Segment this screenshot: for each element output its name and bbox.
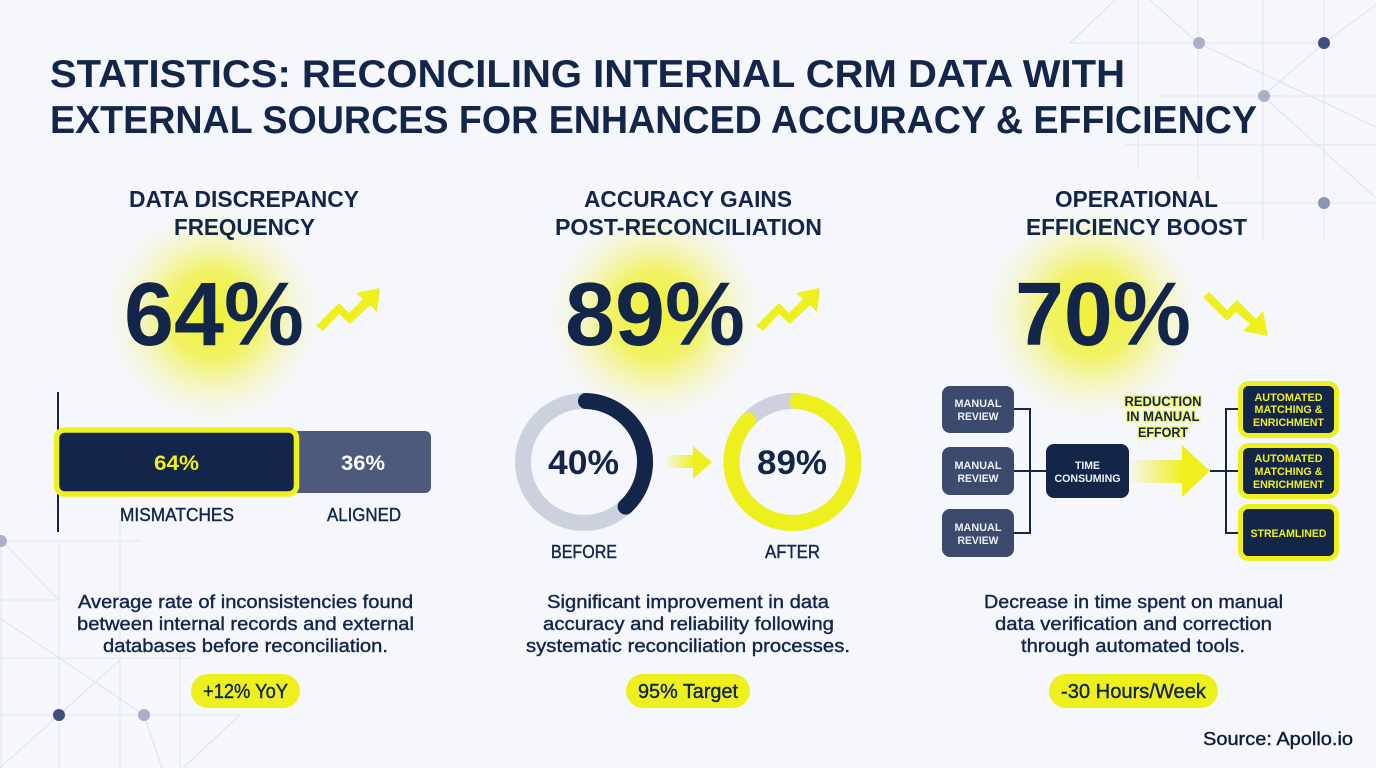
box: automated matching 1: ENRICHMENT	[1253, 417, 1324, 429]
donut chart: after	[732, 401, 854, 562]
donut chart: before: BEFORE	[551, 542, 617, 562]
big stat: 70%: 70%	[1015, 265, 1191, 365]
stacked bar chart: ALIGNED	[327, 505, 401, 525]
pill: -30 Hours/Week: -30 Hours/Week	[1061, 681, 1207, 703]
label: reduction in manual effort	[1124, 394, 1202, 440]
heading: data discrepancy	[129, 186, 359, 240]
donut chart: before: 40%	[548, 444, 619, 482]
pill: +12% YoY: +12% YoY	[203, 681, 288, 703]
pill: -30 Hours/Week	[1049, 674, 1218, 708]
stacked bar chart	[56, 392, 431, 532]
heading: accuracy gains: ACCURACY GAINS	[584, 186, 792, 212]
box: automated matching 2	[1240, 446, 1336, 496]
description text	[77, 591, 414, 656]
box: streamlined	[1240, 506, 1336, 558]
arrow: reduction	[1130, 445, 1210, 497]
description text: Significant improvement in data	[547, 591, 830, 612]
box: manual review 2: REVIEW	[958, 473, 999, 485]
panel: accuracy gains	[523, 186, 854, 708]
description text: databases before reconciliation.	[103, 635, 388, 656]
box: time consuming: TIME	[1075, 460, 1100, 472]
donut chart: after: 89%	[757, 444, 827, 482]
flow diagram	[942, 384, 1336, 558]
label: reduction in manual effort: REDUCTION	[1124, 394, 1202, 409]
heading: accuracy gains: POST-RECONCILIATION	[555, 214, 822, 240]
stacked bar chart: 36%	[341, 452, 385, 475]
highlight glow: 70%	[976, 197, 1208, 429]
box: manual review 3: REVIEW	[958, 535, 999, 547]
icon: trend down arrow	[1203, 292, 1268, 336]
title: EXTERNAL SOURCES FOR ENHANCED ACCURACY & EFFICIENCY	[50, 99, 1257, 142]
box: automated matching 2: MATCHING &	[1254, 466, 1323, 478]
description text: Decrease in time spent on manual	[984, 591, 1283, 612]
title: STATISTICS: RECONCILING INTERNAL CRM DATA WITH	[50, 53, 1125, 96]
box: automated matching 2: ENRICHMENT	[1253, 479, 1324, 491]
title	[50, 53, 1257, 142]
panel: operational efficiency	[942, 186, 1336, 708]
network pattern: top right	[1070, 0, 1376, 240]
box: manual review 1	[942, 386, 1014, 433]
donut chart: after: AFTER	[765, 542, 820, 562]
highlight glow: 64%	[97, 199, 329, 431]
highlight glow: 89%	[539, 199, 771, 431]
icon: trend up arrow	[756, 288, 820, 331]
description text	[984, 591, 1283, 656]
big stat: 64%: 64%	[124, 265, 304, 365]
donut chart: before	[523, 401, 645, 562]
heading: operational efficiency: OPERATIONAL	[1055, 186, 1218, 212]
heading: data discrepancy: DATA DISCREPANCY	[129, 186, 359, 212]
description text: through automated tools.	[1021, 635, 1245, 656]
connectors	[1014, 409, 1240, 533]
box: time consuming	[1046, 444, 1129, 498]
description text: data verification and correction	[995, 613, 1272, 634]
heading: data discrepancy: FREQUENCY	[174, 214, 315, 240]
box: manual review 2	[942, 447, 1014, 495]
heading: operational efficiency: EFFICIENCY BOOST	[1026, 214, 1247, 240]
box: automated matching 1: MATCHING &	[1254, 404, 1323, 416]
box: automated matching 2: AUTOMATED	[1254, 453, 1323, 465]
label: reduction in manual effort: IN MANUAL	[1126, 409, 1200, 424]
box: manual review 1: REVIEW	[958, 411, 999, 423]
box: manual review 2: MANUAL	[954, 460, 1002, 472]
description text: accuracy and reliability following	[543, 613, 834, 634]
panel: data discrepancy frequency	[56, 186, 431, 708]
box: streamlined: STREAMLINED	[1250, 528, 1327, 540]
stacked bar chart: 64%	[154, 452, 199, 475]
description text: between internal records and external	[77, 613, 414, 634]
big stat: 89%: 89%	[565, 265, 745, 365]
box: time consuming: CONSUMING	[1054, 473, 1120, 485]
pill: +12% YoY	[191, 674, 300, 708]
description text	[526, 591, 850, 656]
icon: trend up arrow	[316, 288, 380, 331]
box: automated matching 1	[1240, 384, 1336, 436]
box: automated matching 1: AUTOMATED	[1254, 392, 1323, 404]
network pattern: bottom left	[0, 520, 240, 768]
box: manual review 1: MANUAL	[954, 398, 1002, 410]
heading: operational efficiency	[1026, 186, 1247, 240]
box: manual review 3	[942, 509, 1014, 557]
pill: 95% Target	[626, 674, 750, 708]
label: reduction in manual effort: EFFORT	[1138, 425, 1189, 440]
arrow: before to after	[665, 446, 712, 479]
description text: Average rate of inconsistencies found	[78, 591, 413, 612]
box: manual review 3: MANUAL	[954, 522, 1002, 534]
description text: systematic reconciliation processes.	[526, 635, 850, 656]
stacked bar chart: MISMATCHES	[120, 505, 234, 525]
source note: Source: Apollo.io	[1203, 729, 1353, 749]
heading: accuracy gains	[555, 186, 822, 240]
pill: 95% Target: 95% Target	[638, 681, 738, 703]
